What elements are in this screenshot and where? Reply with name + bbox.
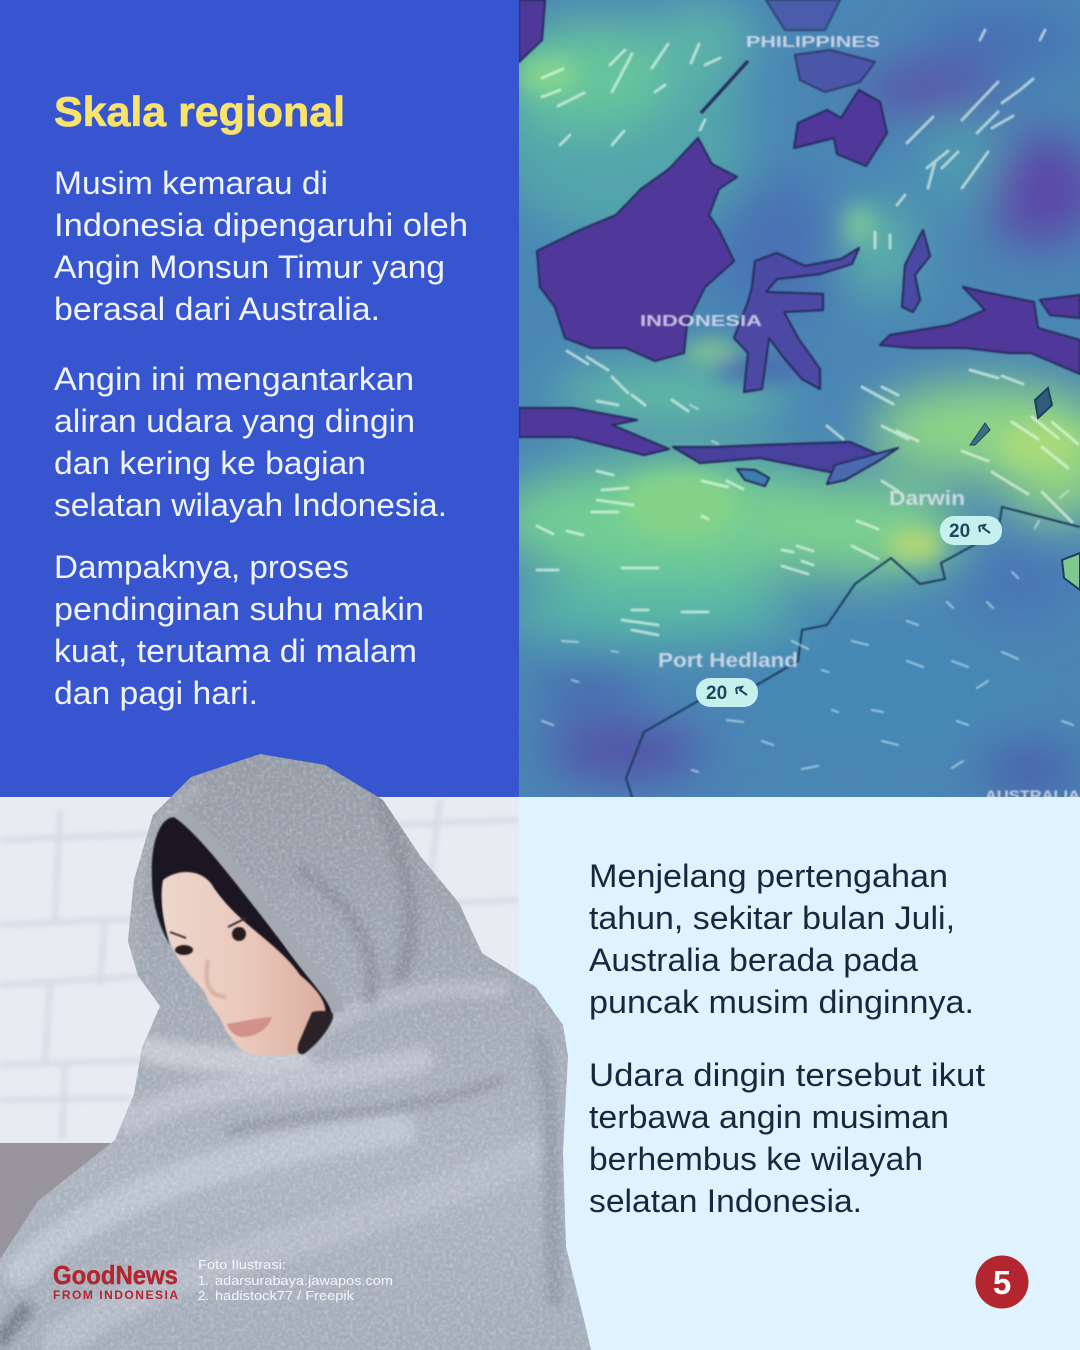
text block: paragraph 1 <box>54 165 468 327</box>
island: Sumba <box>737 469 769 486</box>
island: Sulawesi <box>734 248 859 392</box>
photo credits: Foto Ilustrasi: <box>198 1257 286 1272</box>
face <box>162 872 325 1056</box>
heading: Skala regional <box>54 88 345 135</box>
text block: paragraph 4: tahun, sekitar bulan Juli, <box>589 900 955 936</box>
label: Darwin: Darwin <box>889 488 965 510</box>
text block: paragraph 1: Musim kemarau di <box>54 165 328 201</box>
text block: paragraph 5: Udara dingin tersebut ikut <box>589 1057 985 1093</box>
map labels <box>640 34 1080 803</box>
label: PHILIPPINES: PHILIPPINES <box>746 34 880 51</box>
text block: paragraph 3: pendinginan suhu makin <box>54 591 424 627</box>
text block: paragraph 3: kuat, terutama di malam <box>54 633 417 669</box>
panel: photo of woman wrapped in a blanket <box>0 750 600 1350</box>
island: Borneo <box>537 138 737 361</box>
island: Timor <box>827 448 898 484</box>
text block: paragraph 2: dan kering ke bagian <box>54 445 366 481</box>
badge: Port Hedland 20: 20 <box>706 683 727 704</box>
photo credits: 2. <box>198 1288 209 1303</box>
map: wind map of Indonesia and Australia <box>490 0 1080 803</box>
island: Java <box>519 408 669 455</box>
blanket folds <box>0 790 555 1340</box>
text block: paragraph 2 <box>54 361 447 523</box>
text block: paragraph 4: Australia berada pada <box>589 942 918 978</box>
page number badge <box>976 1256 1028 1308</box>
text block: paragraph 3 <box>54 549 424 711</box>
island: Lesser Sunda chain <box>673 442 880 472</box>
text block: paragraph 2: Angin ini mengantarkan <box>54 361 414 397</box>
label: AUSTRALIA cut off: AUSTRALIA <box>985 787 1080 803</box>
photo background: white brick wall <box>0 797 519 1259</box>
text block: paragraph 5 <box>589 1057 985 1219</box>
badge: Darwin 20: 20 <box>949 521 970 542</box>
photo credits: adarsurabaya.jawapos.com <box>215 1273 393 1288</box>
Australia coast <box>626 507 1080 800</box>
land: dark purple islands <box>519 0 1080 486</box>
text block: paragraph 4 <box>589 858 974 1020</box>
island: Mindanao <box>794 90 887 166</box>
blanket <box>0 754 591 1350</box>
hood rim <box>178 812 338 1012</box>
text block: paragraph 5: terbawa angin musiman <box>589 1099 949 1135</box>
text block: paragraph 1: Indonesia dipengaruhi oleh <box>54 207 468 243</box>
label: Port Hedland: Port Hedland <box>658 650 798 672</box>
nose shadow <box>207 960 226 997</box>
logo: GoodNews from Indonesia <box>53 1260 178 1302</box>
island: Halmahera <box>902 230 930 312</box>
island: northern Philippines <box>795 50 875 92</box>
text block: paragraph 3: Dampaknya, proses <box>54 549 349 585</box>
text block: paragraph 2: selatan wilayah Indonesia. <box>54 487 447 523</box>
photo credits <box>198 1257 393 1303</box>
badge: Port Hedland 20 <box>696 678 758 707</box>
text block: paragraph 1: berasal dari Australia. <box>54 291 380 327</box>
panel: blue text panel <box>0 0 519 797</box>
badge: Darwin 20 <box>940 516 1002 545</box>
eyes <box>170 918 246 955</box>
label: INDONESIA: INDONESIA <box>640 313 763 330</box>
text block: paragraph 1: Angin Monsun Timur yang <box>54 249 445 285</box>
corner: Malay peninsula <box>519 0 545 62</box>
text block: paragraph 4: puncak musim dinginnya. <box>589 984 974 1020</box>
photo credits: 1. <box>198 1273 209 1288</box>
hair <box>152 817 333 1016</box>
text block: paragraph 5: berhembus ke wilayah <box>589 1141 923 1177</box>
island: Papua <box>880 287 1080 374</box>
logo: GoodNews from Indonesia: FROM INDONESIA <box>53 1288 178 1302</box>
blanket fur texture <box>0 750 600 1350</box>
wind streaks <box>537 30 1078 635</box>
text block: paragraph 4: Menjelang pertengahan <box>589 858 948 894</box>
text block: paragraph 5: selatan Indonesia. <box>589 1183 862 1219</box>
photo credits: hadistock77 / Freepik <box>215 1288 355 1303</box>
lips <box>227 1017 272 1037</box>
text block: paragraph 2: aliran udara yang dingin <box>54 403 415 439</box>
page number badge: 5 <box>993 1264 1011 1301</box>
neck shadow <box>298 1011 333 1054</box>
text block: paragraph 3: dan pagi hari. <box>54 675 258 711</box>
logo: GoodNews from Indonesia: GoodNews <box>53 1260 178 1290</box>
